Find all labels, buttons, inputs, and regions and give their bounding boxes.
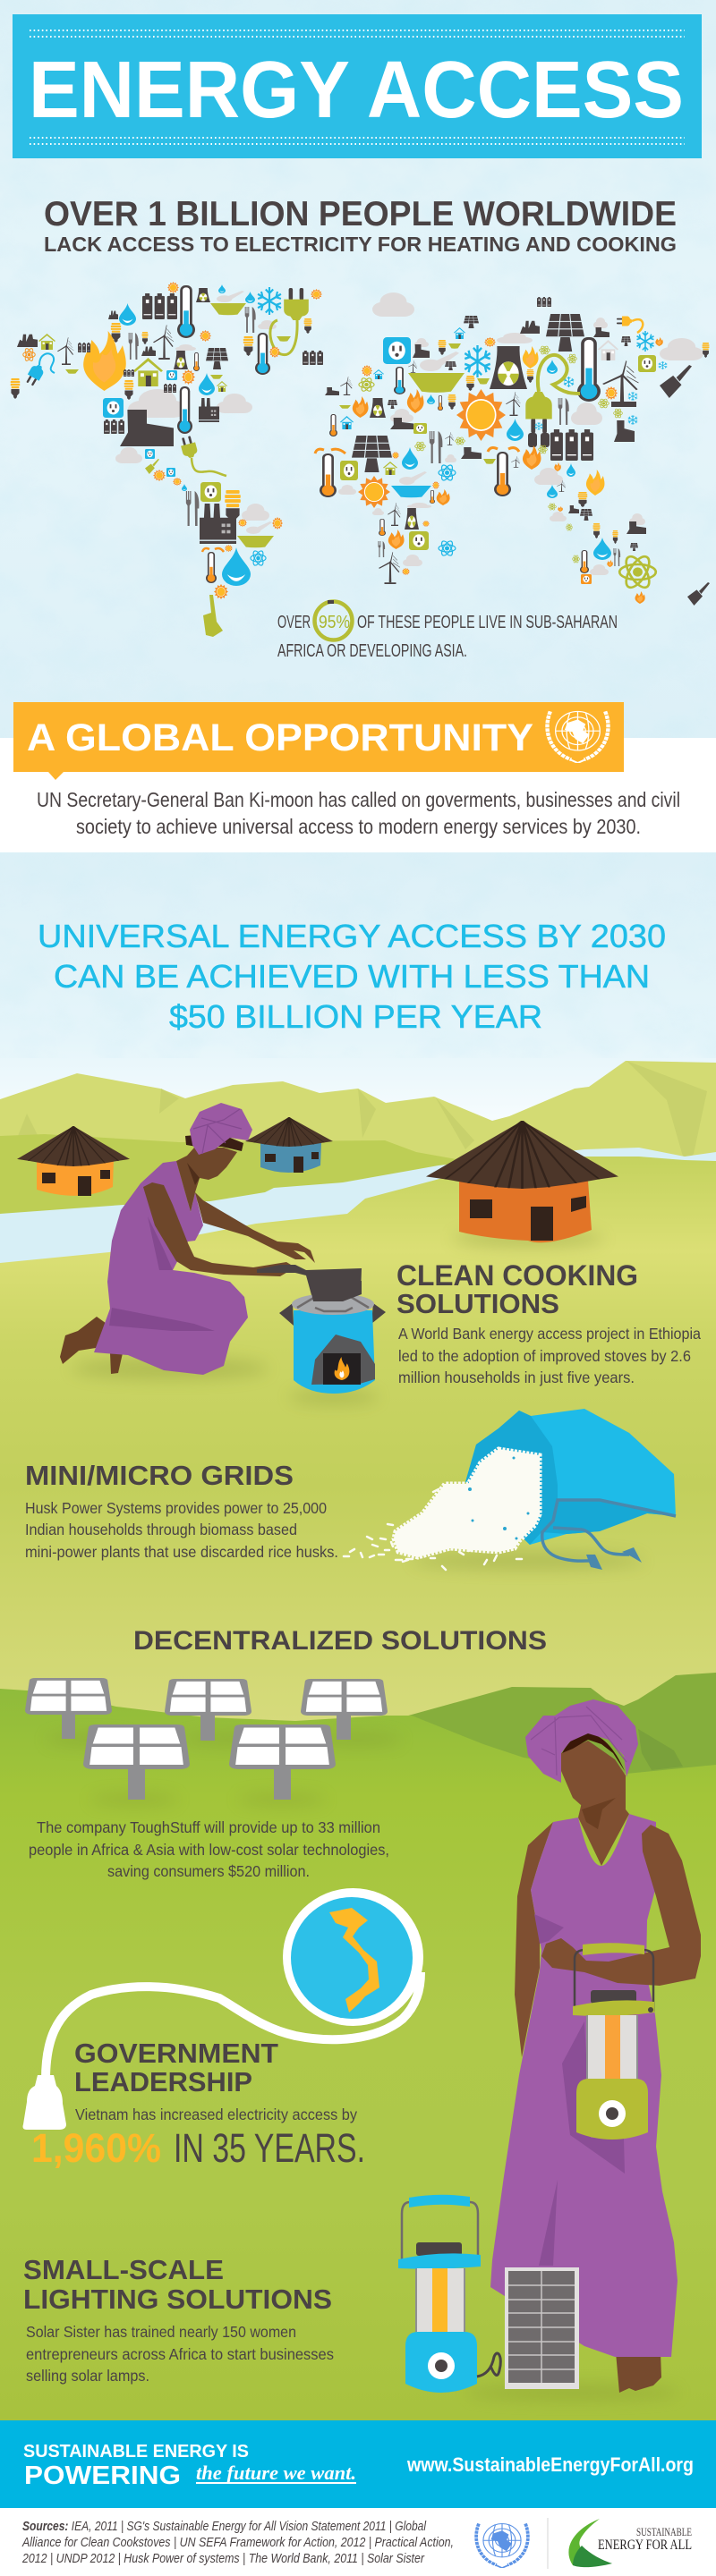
sky background lower [0,852,716,1121]
map: the Americas icons [11,282,323,637]
callout: 95 percent: OVER [277,613,311,632]
text: small-scale lighting [23,2255,334,2385]
turban [525,1699,638,1783]
subtitle: LACK ACCESS TO ELECTRICITY FOR HEATING AND COOKING [44,233,677,256]
text: mini/micro grids: mini-power plants that use discarded rice husks. [25,1543,338,1561]
sky background top [0,0,716,738]
neck [578,1775,629,1866]
footer band: the future we want. [196,2462,356,2484]
text: small-scale lighting: selling solar lamps. [26,2367,149,2385]
text: clean cooking: SOLUTIONS [396,1288,559,1319]
lantern: blue with solar panel [398,2195,579,2393]
rice grains [344,1449,540,1570]
text: ToughStuff: saving consumers $520 million. [107,1862,310,1880]
subtitle: OVER 1 BILLION PEOPLE WORLDWIDE [44,195,677,233]
heading: universal energy access [38,918,666,1035]
rice sack [344,1409,676,1570]
text: mini/micro grids: Indian households through biomass based [25,1521,297,1538]
turban [190,1103,252,1155]
sources: Sources: IEA, 2011 | SG's Sustainable Energy for All Vision Statement 2011 | Global [22,2519,427,2534]
legs [60,1317,123,1374]
hut: blue [245,1117,333,1173]
logo: UN [476,2524,528,2568]
heading: decentralized solutions: DECENTRALIZED SOLUTIONS [133,1626,547,1656]
world map made of energy icons [11,282,710,637]
callout: 95 percent: AFRICA OR DEVELOPING ASIA. [277,641,467,661]
text: mini/micro grids: Husk Power Systems provides power to 25,000 [25,1499,327,1517]
logo: Sustainable Energy for All: ENERGY FOR ALL [598,2538,692,2553]
face [561,1741,626,1812]
callout: 95 percent [277,600,618,661]
text: government leadership: GOVERNMENT [74,2038,278,2069]
text: clean cooking: CLEAN COOKING [396,1259,638,1292]
title: ENERGY ACCESS [29,46,684,135]
text: clean cooking: million households in just five years. [398,1368,635,1386]
foot [616,2352,661,2393]
solar panels [25,1678,388,1800]
text: government leadership: 1,960% [31,2125,161,2171]
kneeling woman [60,1103,315,1375]
heading: universal energy access: UNIVERSAL ENERGY ACCESS BY 2030 [38,918,666,954]
text: ToughStuff: people in Africa & Asia with low-cost solar technologies, [29,1841,389,1859]
icon: UN emblem [547,711,609,763]
footer band: POWERING [24,2462,181,2490]
banner: a global opportunity [13,702,624,780]
text: Ban Ki-moon statement: society to achieve universal access to modern energy services by 2030. [76,815,641,838]
cooking pot and clean stove [257,1265,386,1394]
text: small-scale lighting: SMALL-SCALE [23,2255,224,2285]
text: Ban Ki-moon statement [37,788,680,838]
sources [21,2519,454,2566]
text: clean cooking [396,1259,701,1386]
landscape: mountains, river and ground [0,1061,716,2420]
text: small-scale lighting: Solar Sister has trained nearly 150 women [26,2323,296,2341]
text: government leadership: LEADERSHIP [74,2066,252,2097]
heading: universal energy access: CAN BE ACHIEVED WITH LESS THAN [54,958,650,995]
heading: universal energy access: $50 BILLION PER YEAR [169,998,542,1035]
icon: Vietnam map in circle [283,1888,423,2026]
text: government leadership: Vietnam has increased electricity access by [75,2106,357,2123]
left arm [515,1822,553,2057]
text: small-scale lighting: entrepreneurs across Africa to start businesses [26,2345,334,2363]
map: Europe, Asia and Africa icons [315,292,710,606]
sources: 2012 | UNDP 2012 | Husk Power of systems | The World Bank, 2011 | Solar Sister [21,2551,425,2566]
standing woman [490,1699,701,2393]
subtitle [44,195,677,256]
title banner [13,14,702,158]
text: mini/micro grids [25,1460,338,1561]
arms [195,1192,315,1263]
shadows [45,1230,680,2400]
footer sources and logos [0,2508,716,2576]
dress [490,1814,678,2357]
text: ToughStuff: The company ToughStuff will provide up to 33 million [37,1818,380,1836]
small solar panel [505,2267,579,2389]
icon: white plug with cord [23,1972,421,2130]
sources: Alliance for Clean Cookstoves | UN SEFA Framework for Action, 2012 | Practical Action, [21,2535,454,2550]
logo: Sustainable Energy for All: SUSTAINABLE [636,2525,692,2538]
footer band [0,2420,716,2508]
dress [94,1161,248,1375]
panel: a global opportunity [0,702,716,852]
text: mini/micro grids: MINI/MICRO GRIDS [25,1460,294,1491]
hut: left orange [17,1126,130,1196]
callout: 95 percent: 95% [319,613,350,632]
text: ToughStuff [29,1818,389,1880]
right arm [541,1825,701,1986]
callout: 95 percent: OF THESE PEOPLE LIVE IN SUB-SAHARAN [357,613,618,632]
banner: a global opportunity: A GLOBAL OPPORTUNITY [27,716,533,759]
lantern: green [573,1943,654,2140]
text: clean cooking: led to the adoption of improved stoves by 2.6 [398,1347,691,1365]
logo: Sustainable Energy for All [568,2519,692,2567]
text: small-scale lighting: LIGHTING SOLUTIONS [23,2284,332,2315]
hut: large orange [426,1121,618,1242]
text: government leadership [31,2038,365,2171]
footer band: SUSTAINABLE ENERGY IS [23,2442,249,2462]
face and neck [176,1148,237,1212]
text: government leadership: IN 35 YEARS. [174,2125,365,2171]
